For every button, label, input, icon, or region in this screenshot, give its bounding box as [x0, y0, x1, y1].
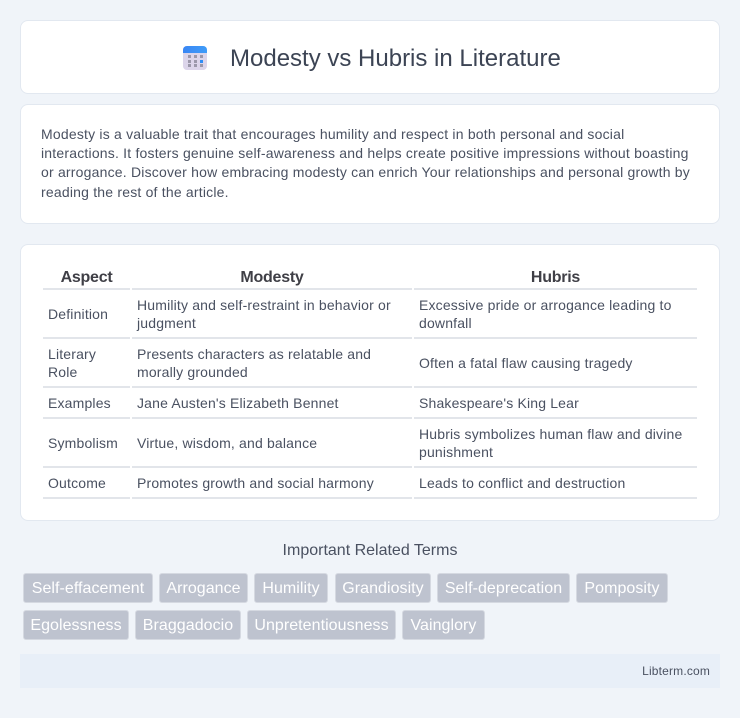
- tag: Self-effacement: [32, 580, 144, 597]
- intro text: interactions. It fosters genuine self-awareness and helps create positive impressions without boasting: [41, 145, 689, 161]
- intro text: Modesty is a valuable trait that encourages humility and respect in both personal and social: [41, 126, 624, 142]
- outcome hubris: Leads to conflict and destruction: [419, 475, 625, 491]
- footer: source: Libterm.com: [642, 664, 710, 678]
- definition hubris: downfall: [419, 315, 472, 331]
- examples hubris: Shakespeare's King Lear: [419, 395, 579, 411]
- footer bar: [20, 654, 720, 688]
- tag: Arrogance: [166, 580, 241, 597]
- row: literary role: [48, 346, 96, 380]
- intro text: reading the rest of the article.: [41, 184, 229, 200]
- table header: aspect: Aspect: [61, 269, 112, 286]
- tag: [23, 573, 153, 603]
- tag: [247, 610, 396, 640]
- definition hubris: Excessive pride or arrogance leading to: [419, 297, 672, 313]
- tag: [23, 610, 129, 640]
- tag: Pomposity: [584, 580, 660, 597]
- tag: Unpretentiousness: [254, 617, 389, 634]
- intro text: [41, 126, 690, 200]
- tag: [576, 573, 668, 603]
- symbolism hubris: [419, 426, 682, 460]
- symbolism modesty: Virtue, wisdom, and balance: [137, 435, 317, 451]
- symbolism hubris: punishment: [419, 444, 493, 460]
- tag: [402, 610, 485, 640]
- literary role hubris: Often a fatal flaw causing tragedy: [419, 355, 633, 371]
- tag: Braggadocio: [143, 617, 233, 634]
- row: symbolism: Symbolism: [48, 435, 118, 451]
- definition modesty: Humility and self-restraint in behavior or: [137, 297, 391, 313]
- tag: Vainglory: [411, 617, 476, 634]
- definition modesty: judgment: [137, 315, 196, 331]
- literary role modesty: morally grounded: [137, 364, 248, 380]
- outcome modesty: Promotes growth and social harmony: [137, 475, 374, 491]
- tag: Egolessness: [30, 617, 122, 634]
- tag: [159, 573, 248, 603]
- examples modesty: Jane Austen's Elizabeth Bennet: [137, 395, 339, 411]
- intro text: or arrogance. Discover how embracing modesty can enrich Your relationships and personal growth by: [41, 164, 690, 180]
- tag: [437, 573, 570, 603]
- literary role modesty: Presents characters as relatable and: [137, 346, 371, 362]
- tag: Humility: [262, 580, 320, 597]
- tag: [254, 573, 328, 603]
- icon: calendar: [183, 46, 207, 70]
- row: literary role: Role: [48, 364, 77, 380]
- table header: hubris: Hubris: [531, 269, 580, 286]
- heading: related terms: Important Related Terms: [283, 542, 457, 559]
- tag: [335, 573, 431, 603]
- tag: Grandiosity: [342, 580, 424, 597]
- row: literary role: Literary: [48, 346, 96, 362]
- title: Modesty vs Hubris in Literature: [230, 45, 561, 72]
- tags: related terms: [23, 573, 668, 640]
- row: outcome: Outcome: [48, 475, 106, 491]
- panel: comparison table: [20, 244, 720, 521]
- definition hubris: [419, 297, 672, 331]
- panel: introduction: [20, 104, 720, 224]
- symbolism hubris: Hubris symbolizes human flaw and divine: [419, 426, 682, 442]
- literary role modesty: [137, 346, 371, 380]
- table header: modesty: Modesty: [240, 269, 304, 286]
- definition modesty: [136, 297, 391, 331]
- title card: [20, 20, 720, 94]
- row: definition: Definition: [48, 306, 108, 322]
- tag: [135, 610, 241, 640]
- tag: Self-deprecation: [445, 580, 562, 597]
- row: examples: Examples: [48, 395, 111, 411]
